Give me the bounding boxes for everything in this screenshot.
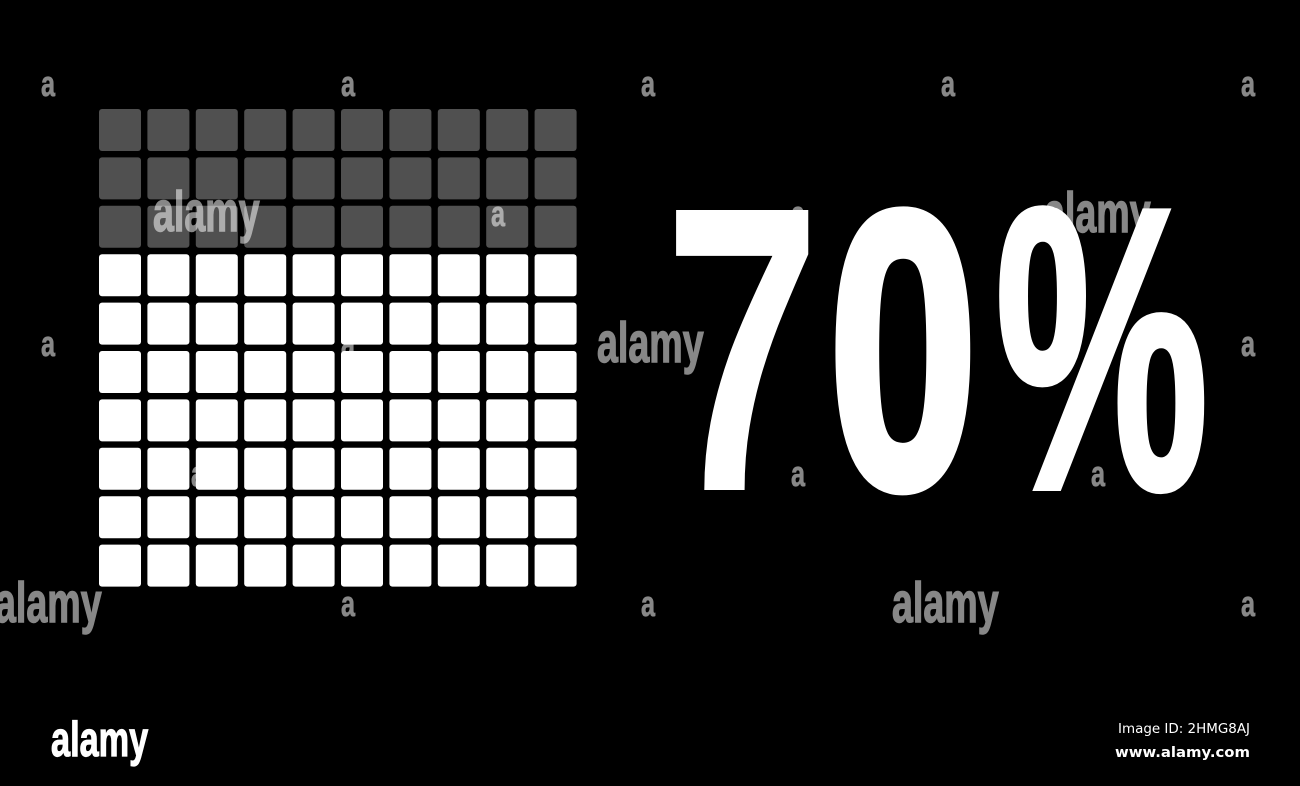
watermark overlay: a bbox=[1091, 454, 1106, 494]
watermark overlay: a bbox=[641, 64, 656, 104]
remaining 30 percent: grey squares bbox=[99, 109, 577, 248]
watermark overlay: a bbox=[941, 64, 956, 104]
image id: Image ID: 2HMG8AJ bbox=[1118, 722, 1250, 737]
website address: www.alamy.com bbox=[1115, 745, 1250, 761]
watermark overlay: a bbox=[341, 64, 356, 104]
watermark overlay: a bbox=[341, 324, 356, 364]
alamy logo: alamy bbox=[51, 712, 149, 766]
watermark overlay: alamy bbox=[597, 311, 704, 375]
watermark overlay: a bbox=[41, 64, 56, 104]
watermark overlay: a bbox=[791, 194, 806, 234]
waffle chart: 70 of 100 squares filled bbox=[99, 109, 577, 587]
watermark overlay: a bbox=[341, 584, 356, 624]
watermark overlay: a bbox=[641, 584, 656, 624]
watermark overlay: a bbox=[1241, 324, 1256, 364]
watermark overlay: alamy bbox=[892, 571, 999, 635]
watermark overlay: a bbox=[791, 454, 806, 494]
watermark overlay: alamy bbox=[1044, 181, 1151, 245]
watermark overlay: alamy bbox=[153, 180, 260, 244]
big percentage figure: 0 bbox=[828, 131, 978, 571]
big percentage figure: 7 bbox=[664, 123, 821, 577]
filled 70 percent: white squares bbox=[99, 254, 577, 587]
big percentage figure: % bbox=[995, 125, 1209, 574]
watermark overlay: a bbox=[191, 454, 206, 494]
watermark overlay: a bbox=[1241, 584, 1256, 624]
big percentage figure bbox=[664, 123, 1209, 577]
watermark overlay: a bbox=[41, 324, 56, 364]
watermark overlay bbox=[0, 64, 1256, 635]
watermark overlay: a bbox=[1241, 64, 1256, 104]
watermark overlay: a bbox=[491, 194, 506, 234]
